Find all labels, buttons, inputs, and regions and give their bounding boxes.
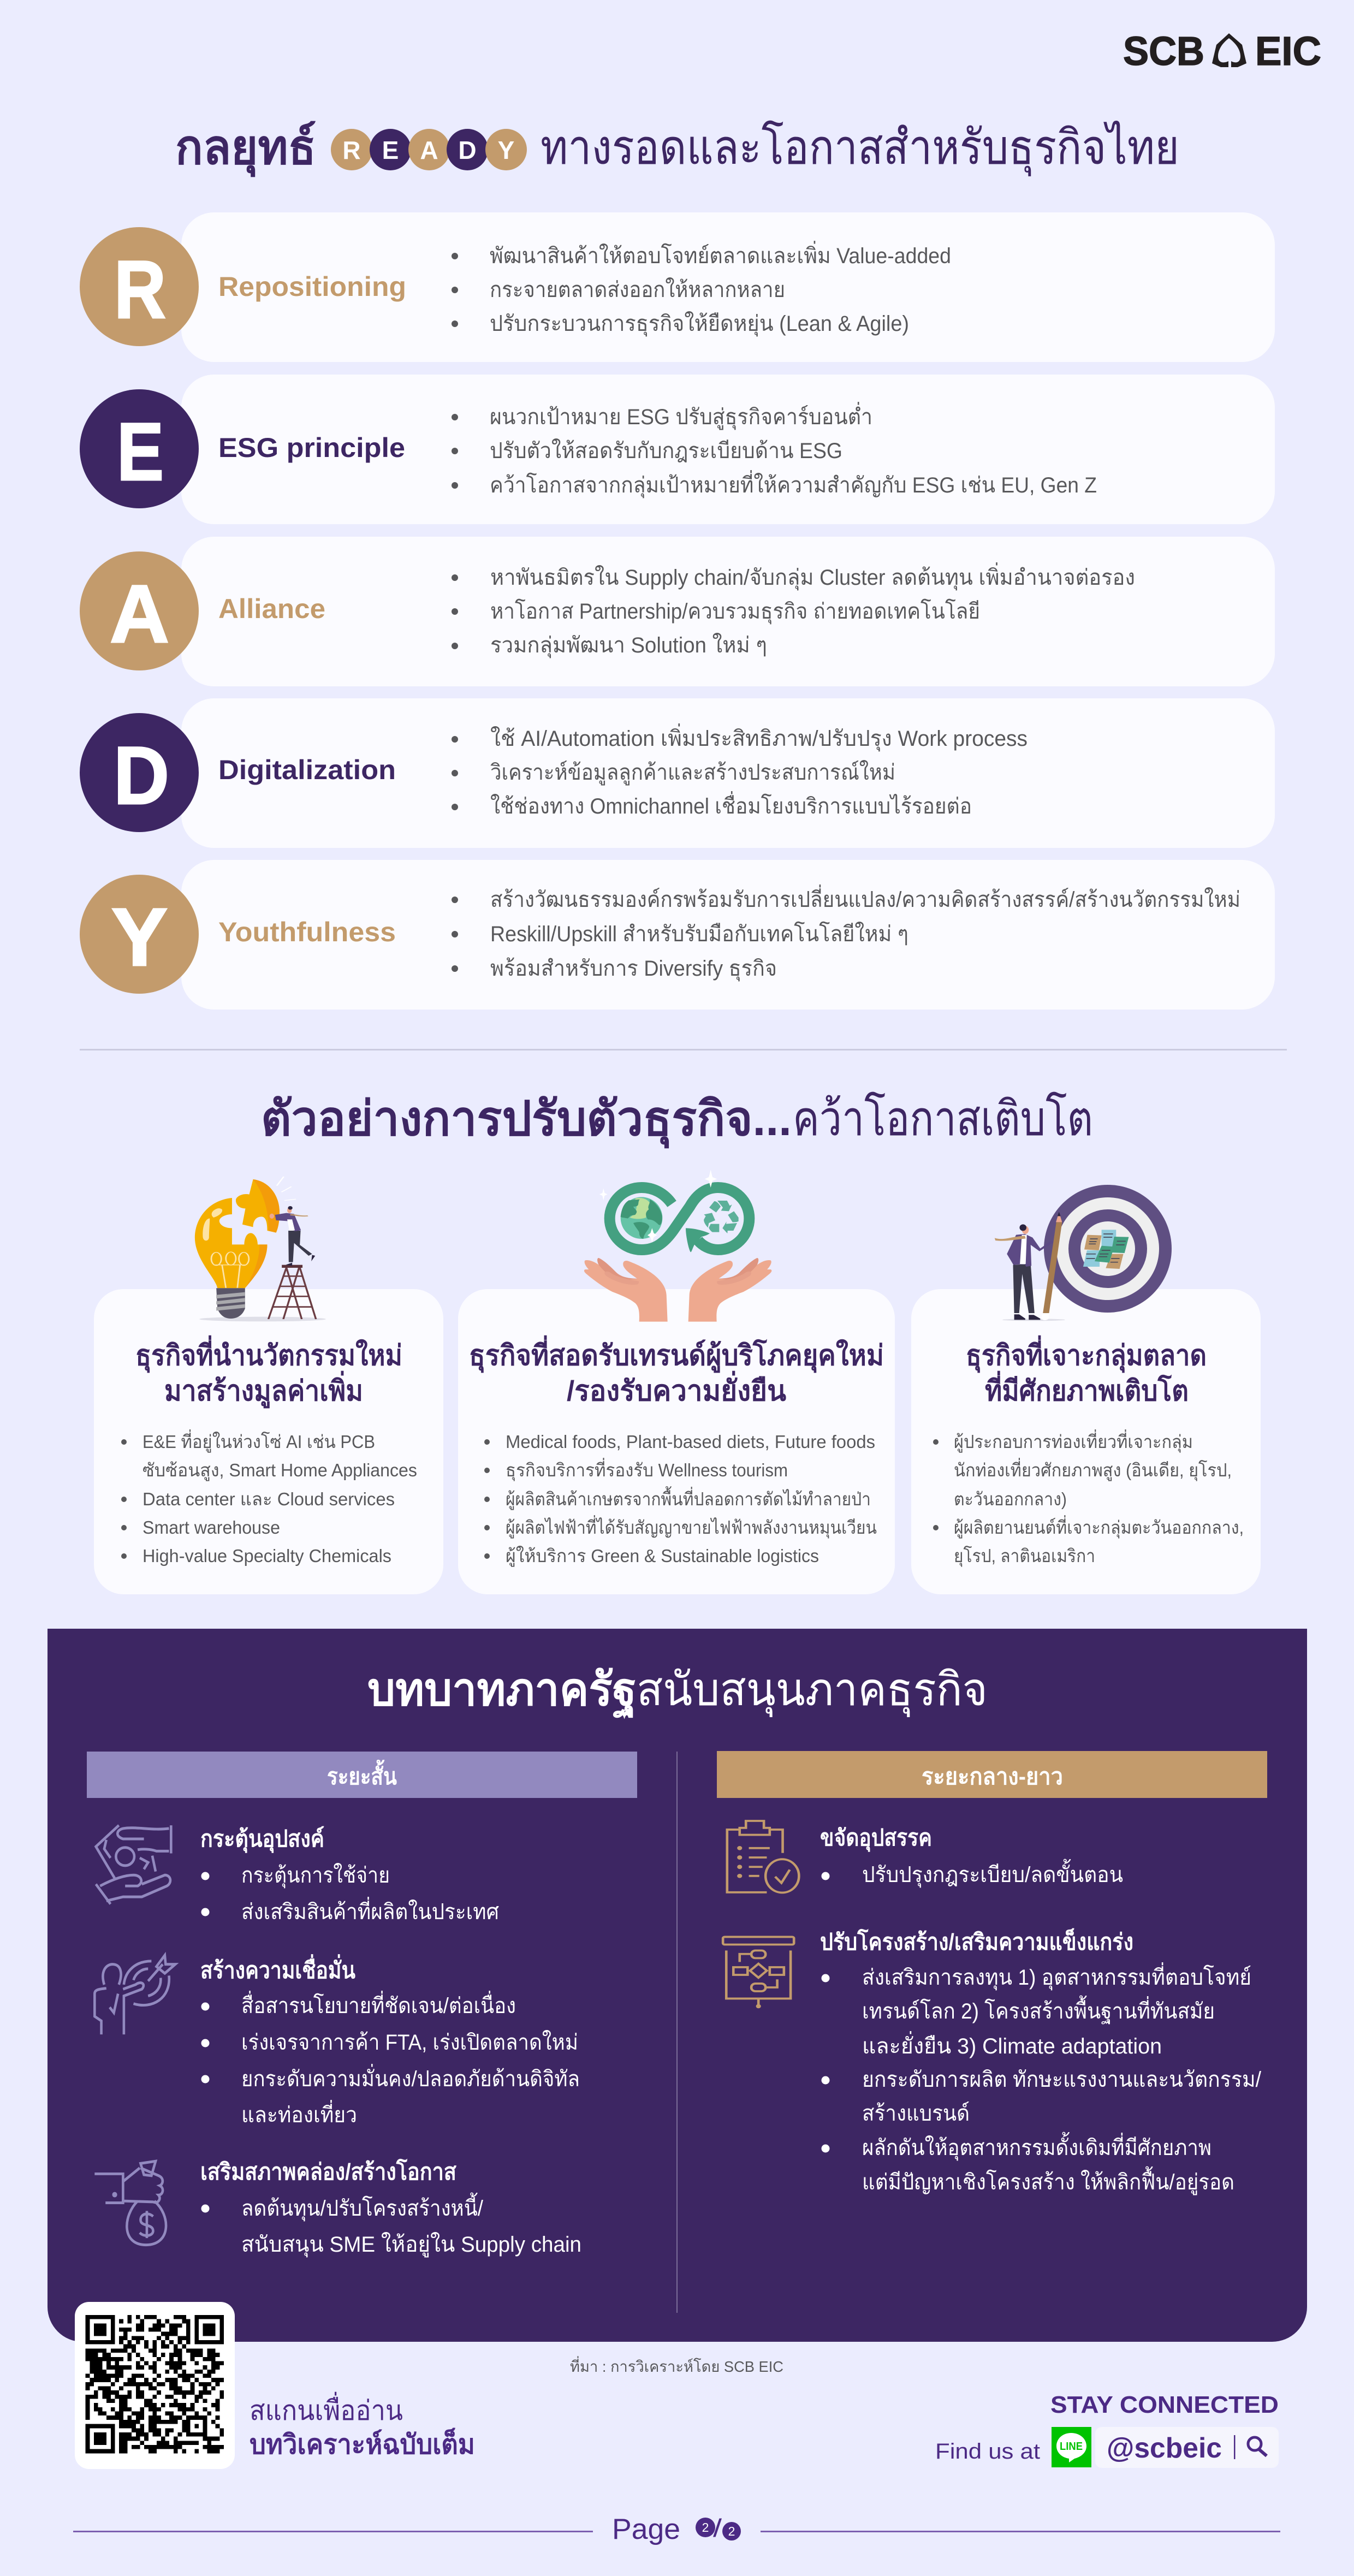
text: stimulate demand: กระตุ้นการใช้จ่าย	[241, 1862, 390, 1889]
short-term header bar	[87, 1752, 637, 1798]
search chip: @scbeic: @scbeic	[1107, 2432, 1222, 2464]
panel: government role	[47, 1629, 1307, 2342]
logo: SCB EIC: SCB	[1123, 28, 1204, 74]
illustration: infinity loop with globe, recycling and hands	[584, 1170, 771, 1322]
text: restructure and strengthen: และยั่งยืน 3) Climate adaptation	[862, 2031, 1162, 2058]
card: innovation: Smart warehouse	[142, 1517, 280, 1538]
text: remove obstacles: ขจัดอุปสรรค	[820, 1825, 932, 1852]
text: restructure and strengthen: สร้างแบรนด์	[862, 2101, 970, 2126]
text: stimulate demand	[200, 1826, 499, 1924]
page indicator: 2	[702, 2520, 709, 2535]
card: growth markets: ยุโรป, ลาตินอเมริกา	[954, 1546, 1095, 1567]
card: consumer trends and sustainability	[458, 1289, 895, 1594]
card: innovation: High-value Specialty Chemicals	[142, 1546, 391, 1566]
panel: Alliance: หาพันธมิตรใน Supply chain/จับกลุ่ม Cluster ลดต้นทุน เพิ่มอำนาจต่อรอง	[490, 562, 1135, 591]
icon: hands exchanging money	[96, 1825, 171, 1904]
card: growth markets: ตะวันออกกลาง)	[954, 1489, 1067, 1509]
text: build confidence: ยกระดับความมั่นคง/ปลอดภัยด้านดิจิทัล	[241, 2064, 580, 2091]
panel: Alliance: A	[110, 568, 169, 660]
panel: Repositioning: Repositioning	[218, 271, 406, 302]
text: remove obstacles: ปรับปรุงกฎระเบียบ/ลดขั้นตอน	[862, 1859, 1123, 1888]
illustration: target with man and pencil	[995, 1185, 1172, 1321]
panel: Digitalization: ใช้ AI/Automation เพิ่มประสิทธิภาพ/ปรับปรุง Work process	[490, 723, 1028, 752]
icon: hand holding money bag	[94, 2161, 166, 2245]
panel: Digitalization	[80, 698, 1275, 848]
text: improve liquidity: สนับสนุน SME ให้อยู่ใน Supply chain	[241, 2231, 581, 2258]
panel: ESG principle	[80, 375, 1275, 524]
stay connected block: Find us at	[935, 2440, 1040, 2464]
card: consumer trends and sustainability: ธุรกิจที่สอดรับเทรนด์ผู้บริโภคยุคใหม่	[469, 1336, 884, 1373]
search chip: @scbeic	[1095, 2427, 1279, 2468]
source note: ที่มา : การวิเคราะห์โดย SCB EIC	[570, 2356, 783, 2375]
text: stimulate demand: กระตุ้นอุปสงค์	[200, 1826, 324, 1853]
mid to long-term header bar: ระยะกลาง-ยาว	[922, 1764, 1063, 1789]
logo: SCB EIC	[1123, 28, 1321, 74]
panel heading: สนับสนุนภาคธุรกิจ	[637, 1664, 988, 1718]
title: READY strategy: Y	[498, 136, 514, 164]
panel: Youthfulness: Reskill/Upskill สำหรับรับมือกับเทคโนโลยีใหม่ ๆ	[490, 921, 908, 946]
text: build confidence	[200, 1954, 580, 2127]
text: scan to read full analysis	[250, 2392, 475, 2460]
page indicator: /	[713, 2514, 722, 2542]
card: consumer trends and sustainability: ผู้ผลิตสินค้าเกษตรจากพื้นที่ปลอดการตัดไม้ทำลายป่า	[506, 1486, 871, 1510]
icon: person and target	[94, 1955, 175, 2034]
page indicator: Page	[612, 2513, 680, 2545]
text: remove obstacles	[820, 1825, 1123, 1888]
text: restructure and strengthen: ปรับโครงสร้าง/เสริมความแข็งแกร่ง	[820, 1928, 1133, 1955]
text: build confidence: สื่อสารนโยบายที่ชัดเจน/ต่อเนื่อง	[241, 1991, 516, 2018]
card: growth markets: ผู้ผลิตยานยนต์ที่เจาะกลุ่มตะวันออกกลาง,	[954, 1515, 1244, 1539]
icon: flowchart board	[723, 1937, 794, 2007]
mid to long-term header bar	[717, 1751, 1267, 1798]
card: innovation: ซับซ้อนสูง, Smart Home Appliances	[142, 1460, 417, 1481]
text: improve liquidity: เสริมสภาพคล่อง/สร้างโอกาส	[200, 2158, 456, 2185]
icon: clipboard checklist	[727, 1821, 799, 1892]
card: consumer trends and sustainability: ผู้ผลิตไฟฟ้าที่ได้รับสัญญาขายไฟฟ้าพลังงานหมุนเวียน	[506, 1515, 877, 1539]
text: restructure and strengthen: ผลักดันให้อุตสาหกรรมดั้งเดิมที่มีศักยภาพ	[862, 2132, 1212, 2161]
text: build confidence: สร้างความเชื่อมั่น	[200, 1954, 355, 1983]
panel: ESG principle: E	[117, 406, 164, 497]
panel: ESG principle: ESG principle	[218, 432, 405, 463]
panel: Youthfulness	[80, 860, 1275, 1010]
card: innovation: ธุรกิจที่นำนวัตกรรมใหม่	[135, 1336, 402, 1373]
panel: ESG principle: คว้าโอกาสจากกลุ่มเป้าหมายที่ให้ความสำคัญกับ ESG เช่น EU, Gen Z	[490, 470, 1097, 498]
text: stimulate demand: ส่งเสริมสินค้าที่ผลิตในประเทศ	[241, 1897, 499, 1924]
text: restructure and strengthen: ยกระดับการผลิต ทักษะแรงงานและนวัตกรรม/	[862, 2068, 1262, 2092]
text: improve liquidity: ลดต้นทุน/ปรับโครงสร้างหนี้/	[241, 2192, 484, 2222]
heading: business adaptation examples	[261, 1091, 1093, 1149]
panel: ESG principle: ปรับตัวให้สอดรับกับกฎระเบียบด้าน ESG	[490, 438, 842, 463]
panel: Repositioning: ปรับกระบวนการธุรกิจให้ยืดหยุ่น (Lean & Agile)	[490, 311, 909, 337]
panel: Alliance	[80, 537, 1275, 686]
text: build confidence: เร่งเจรจาการค้า FTA, เร่งเปิดตลาดใหม่	[241, 2029, 578, 2055]
text: scan to read full analysis: บทวิเคราะห์ฉบับเต็ม	[250, 2427, 475, 2460]
card: consumer trends and sustainability: ผู้ให้บริการ Green & Sustainable logistics	[506, 1546, 819, 1567]
card: consumer trends and sustainability: /รองรับความยั่งยืน	[567, 1371, 786, 1407]
panel: Youthfulness: Youthfulness	[218, 917, 396, 947]
panel: Digitalization: ใช้ช่องทาง Omnichannel เชื่อมโยงบริการแบบไร้รอยต่อ	[490, 791, 972, 818]
panel: Digitalization: D	[114, 729, 169, 821]
card: innovation: E&E ที่อยู่ในห่วงโซ่ AI เช่น PCB	[142, 1429, 375, 1453]
title: READY strategy: D	[458, 136, 477, 164]
illustration: light bulb puzzle and man on ladder	[195, 1177, 326, 1321]
stay connected block	[935, 2391, 1279, 2468]
panel: Alliance: รวมกลุ่มพัฒนา Solution ใหม่ ๆ	[490, 632, 767, 658]
panel: Alliance: หาโอกาส Partnership/ควบรวมธุรกิจ ถ่ายทอดเทคโนโลยี	[490, 599, 980, 625]
title: READY strategy	[175, 120, 1179, 177]
card: innovation: มาสร้างมูลค่าเพิ่ม	[164, 1371, 363, 1409]
panel: Youthfulness: พร้อมสำหรับการ Diversify ธุรกิจ	[490, 957, 777, 982]
panel: Alliance: Alliance	[218, 593, 325, 624]
QR code card	[75, 2302, 235, 2469]
card: innovation: Data center และ Cloud services	[142, 1489, 395, 1509]
panel: Youthfulness: Y	[111, 891, 168, 983]
panel: Repositioning	[80, 212, 1275, 362]
panel: ESG principle: ผนวกเป้าหมาย ESG ปรับสู่ธุรกิจคาร์บอนต่ำ	[490, 402, 872, 430]
panel: Repositioning: กระจายตลาดส่งออกให้หลากหลาย	[490, 277, 785, 302]
page indicator: 2	[728, 2524, 735, 2538]
heading: business adaptation examples: คว้าโอกาสเติบโต	[793, 1091, 1093, 1145]
icon: LINE: LINE	[1060, 2441, 1083, 2453]
text: build confidence: และท่องเที่ยว	[241, 2100, 357, 2127]
stay connected block: STAY CONNECTED	[1050, 2391, 1279, 2418]
card: growth markets	[911, 1289, 1261, 1594]
title: READY strategy: กลยุทธ์	[175, 120, 316, 177]
card: innovation	[94, 1289, 443, 1594]
panel: Digitalization: Digitalization	[218, 755, 396, 785]
card: consumer trends and sustainability: Medical foods, Plant-based diets, Future foods	[506, 1432, 875, 1452]
panel: Repositioning: R	[114, 244, 166, 335]
title: READY strategy: R	[342, 136, 361, 164]
card: consumer trends and sustainability: ธุรกิจบริการที่รองรับ Wellness tourism	[506, 1458, 788, 1481]
text: restructure and strengthen	[820, 1928, 1262, 2195]
card: growth markets: ที่มีศักยภาพเติบโต	[985, 1371, 1189, 1407]
card: growth markets: ผู้ประกอบการท่องเที่ยวที่เจาะกลุ่ม	[954, 1429, 1193, 1453]
panel heading	[367, 1664, 988, 1719]
panel heading: บทบาทภาครัฐ	[367, 1664, 637, 1719]
text: restructure and strengthen: แต่มีปัญหาเชิงโครงสร้าง ให้พลิกฟื้น/อยู่รอด	[862, 2166, 1234, 2195]
title: READY strategy: E	[382, 136, 399, 164]
text: improve liquidity	[200, 2158, 581, 2258]
logo: SCB EIC: EIC	[1255, 28, 1321, 74]
text: restructure and strengthen: ส่งเสริมการลงทุน 1) อุตสาหกรรมที่ตอบโจทย์	[862, 1962, 1251, 1991]
text: restructure and strengthen: เทรนด์โลก 2) โครงสร้างพื้นฐานที่ทันสมัย	[862, 1995, 1215, 2025]
page indicator	[73, 2513, 1280, 2545]
card: growth markets: ธุรกิจที่เจาะกลุ่มตลาด	[966, 1336, 1207, 1373]
card: growth markets: นักท่องเที่ยวศักยภาพสูง (อินเดีย, ยุโรป,	[954, 1458, 1232, 1481]
panel: Repositioning: พัฒนาสินค้าให้ตอบโจทย์ตลาดและเพิ่ม Value-added	[490, 241, 951, 268]
short-term header bar: ระยะสั้น	[327, 1759, 397, 1789]
panel: Youthfulness: สร้างวัฒนธรรมองค์กรพร้อมรับการเปลี่ยนแปลง/ความคิดสร้างสรรค์/สร้างนวัตกรรมใหม่	[490, 885, 1240, 912]
icon: LINE	[1052, 2427, 1091, 2467]
title: READY strategy: A	[420, 136, 438, 164]
text: scan to read full analysis: สแกนเพื่ออ่าน	[250, 2392, 403, 2426]
panel: Digitalization: วิเคราะห์ข้อมูลลูกค้าและสร้างประสบการณ์ใหม่	[490, 759, 895, 785]
title: READY strategy: ทางรอดและโอกาสสำหรับธุรกิจไทย	[541, 120, 1179, 176]
heading: business adaptation examples: ตัวอย่างการปรับตัวธุรกิจ...	[261, 1091, 792, 1149]
